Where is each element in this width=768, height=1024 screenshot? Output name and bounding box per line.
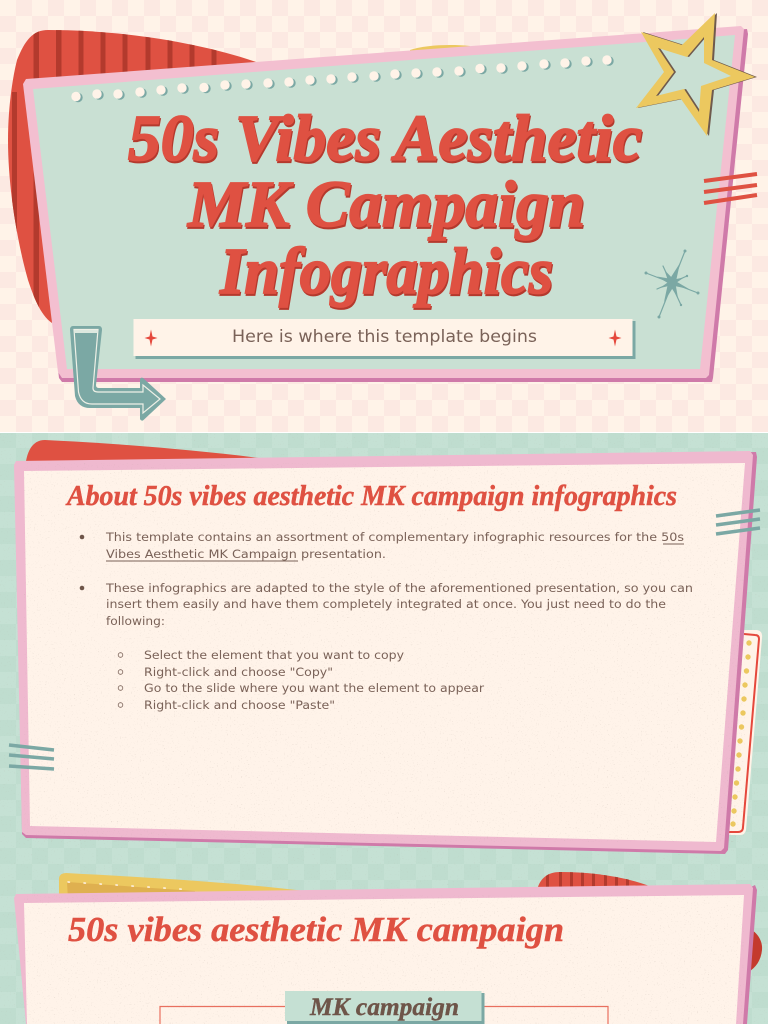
slide 3 yellow shape	[59, 873, 305, 900]
icon: L-shaped arrow	[70, 326, 166, 421]
main title: Infographics	[219, 235, 553, 308]
step list: Right-click and choose "Paste"	[144, 698, 335, 712]
slide 1 red striped shape	[8, 28, 262, 328]
slide 2 red shape behind panel	[25, 440, 275, 470]
bullet 1	[80, 535, 84, 539]
bullet 2 text: following:	[106, 614, 165, 628]
step list: Go to the slide where you want the element to appear	[144, 681, 484, 695]
slide 2 dotted tab	[722, 630, 762, 835]
bullet 2 text	[105, 581, 693, 628]
campaign label box: MK campaign	[309, 994, 459, 1021]
slide 2 background	[0, 433, 768, 865]
slide 1 yellow shape peeking	[410, 45, 470, 56]
icon: sparkle left	[144, 330, 158, 346]
subtitle banner	[134, 319, 636, 359]
bullet 1 text: Vibes Aesthetic MK Campaign presentation.	[106, 547, 386, 561]
icon: yellow star	[636, 13, 757, 136]
slide 1 background	[0, 0, 768, 432]
step list: Right-click and choose "Copy"	[144, 665, 333, 679]
slide 3 background	[0, 865, 768, 1024]
slide 3 red bulge right	[748, 928, 762, 972]
panel: about card	[14, 451, 757, 854]
main title: 50s Vibes Aesthetic	[128, 102, 642, 175]
main title	[128, 102, 642, 308]
decorative teal lines right	[716, 510, 760, 534]
bullet 2 text: These infographics are adapted to the style of the aforementioned presentation, so you can	[105, 581, 693, 595]
dotted marquee row	[71, 55, 612, 101]
campaign label box	[285, 991, 484, 1024]
campaign heading: 50s vibes aesthetic MK campaign	[68, 910, 564, 949]
panel: title card	[23, 26, 748, 382]
bullet 2	[80, 586, 84, 590]
bullet 1 text: This template contains an assortment of complementary infographic resources for the 50s	[105, 530, 684, 544]
bullet 2 text: insert them easily and have them completely integrated at once. You just need to do the	[106, 597, 666, 611]
main title: MK Campaign	[187, 168, 585, 241]
slide 3 red striped shape	[538, 872, 648, 887]
icon: teal starburst	[644, 250, 700, 318]
decorative red lines	[704, 174, 757, 203]
step list: Select the element that you want to copy	[144, 648, 404, 662]
icon: sparkle right	[608, 330, 622, 346]
step list	[118, 648, 484, 712]
about heading: About 50s vibes aesthetic MK campaign infographics	[65, 481, 677, 512]
subtitle text: Here is where this template begins	[232, 327, 537, 347]
diagram frame	[160, 1006, 608, 1024]
panel: campaign card	[14, 884, 757, 1024]
bullet 1 text	[105, 530, 684, 561]
decorative teal lines left	[9, 745, 54, 769]
about body text	[80, 530, 693, 712]
